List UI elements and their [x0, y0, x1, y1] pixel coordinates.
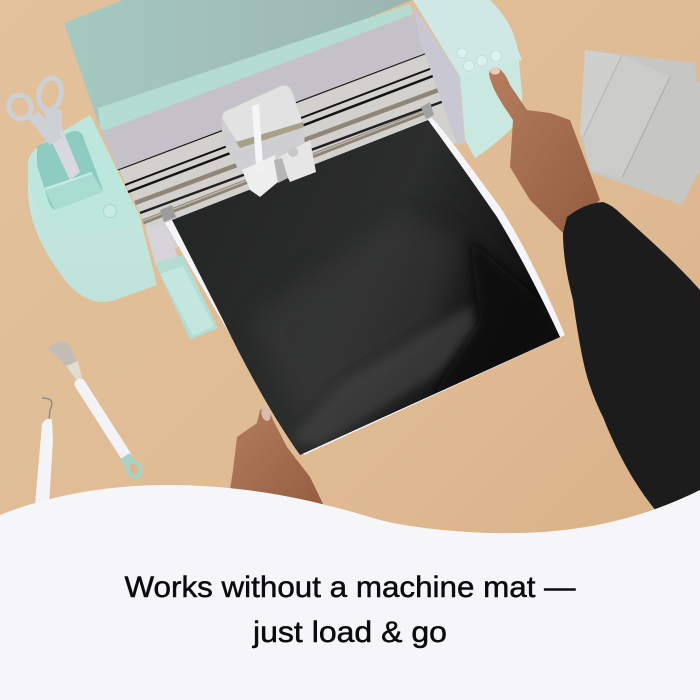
right end top surface [413, 0, 522, 76]
white sheet backing [165, 118, 565, 455]
black sheet [172, 120, 565, 460]
sheet reflection [278, 235, 452, 372]
power button [104, 204, 116, 218]
caption: Works without a machine mat — [124, 571, 576, 604]
caption [124, 571, 576, 649]
open lid [64, 0, 412, 128]
white wave panel [0, 485, 700, 700]
scissors [4, 76, 80, 180]
sheet clamps [160, 205, 176, 222]
tool cup [37, 131, 103, 210]
machine right end [413, 0, 522, 158]
upper hand [489, 68, 600, 233]
lower hand [230, 406, 326, 510]
pen [252, 104, 263, 166]
grey housing band [100, 12, 430, 170]
left end top surface [28, 115, 140, 234]
machine interior [100, 12, 465, 250]
weeding hook tool [35, 398, 53, 505]
rails and belts [118, 52, 455, 222]
machine control buttons [457, 48, 502, 72]
gray feed guide [145, 223, 178, 263]
machine left end [28, 115, 157, 302]
grey paper sheets [580, 50, 700, 205]
spatula tool [47, 342, 143, 479]
cutting carriage [222, 85, 316, 197]
cutting machine [4, 0, 565, 460]
front tray [155, 255, 218, 340]
lid lip [98, 4, 413, 130]
caption: just load & go [252, 616, 447, 649]
right side panel [413, 5, 465, 145]
black sleeve [563, 202, 700, 512]
